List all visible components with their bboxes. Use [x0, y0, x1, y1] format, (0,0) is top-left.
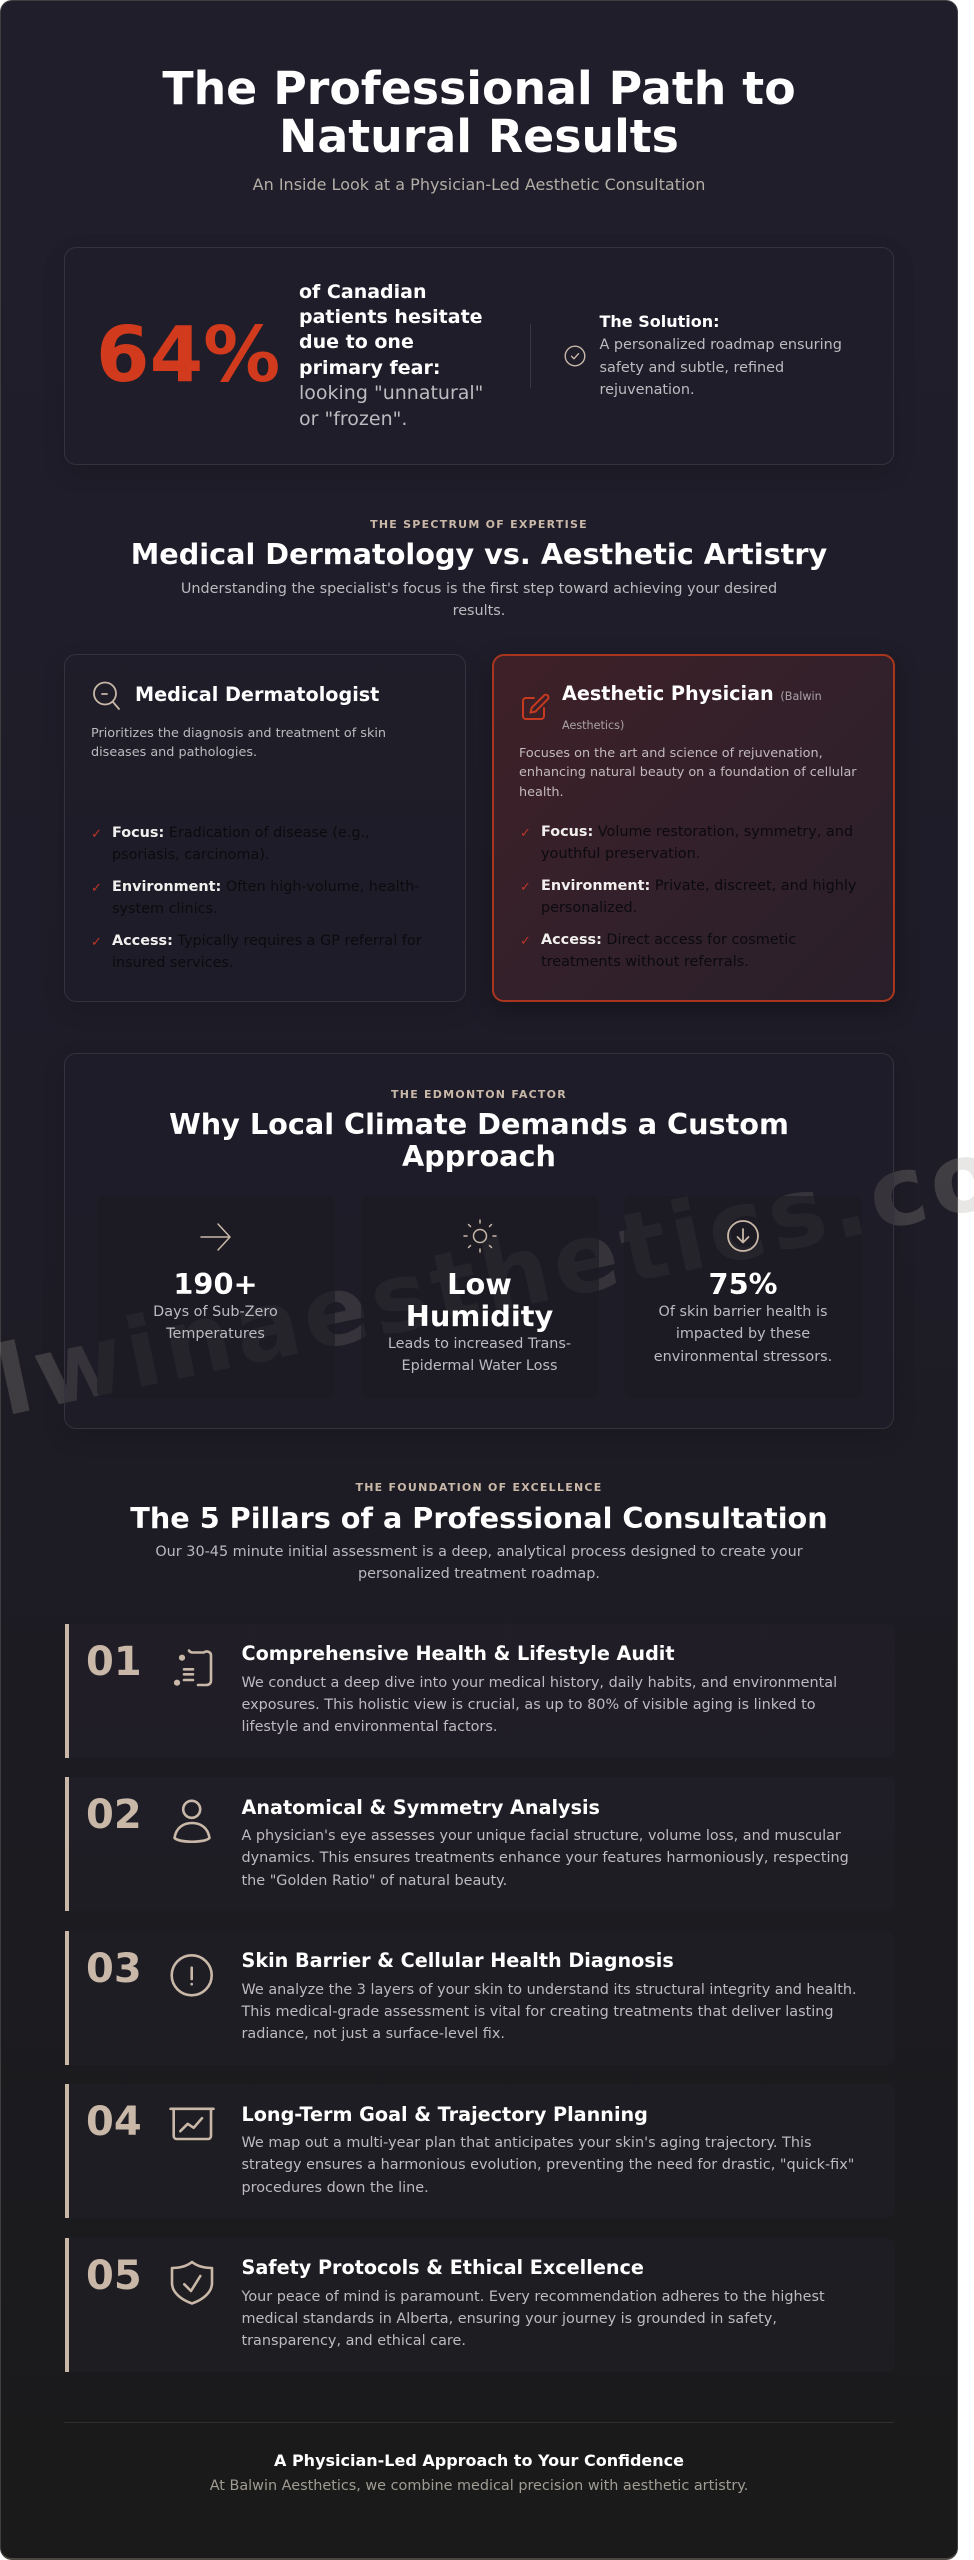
section intro: Understanding the specialist's focus is the first step toward achieving your desired	[181, 580, 777, 596]
pillar 02	[65, 1777, 895, 1911]
description: Of skin barrier health is	[658, 1304, 828, 1320]
description: Epidermal Water Loss	[402, 1358, 557, 1374]
stat description	[299, 280, 483, 430]
stat description: patients hesitate	[299, 306, 483, 328]
value: 75%	[709, 1267, 777, 1301]
title: Natural Results	[279, 109, 679, 163]
section label: spectrum: THE SPECTRUM OF EXPERTISE	[370, 518, 588, 531]
physician description	[519, 746, 857, 800]
text: strategy ensures a harmonious evolution, preventing the need for drastic, "quick-fix"	[242, 2157, 854, 2173]
stat description: primary fear:	[299, 357, 440, 379]
icon: shield check	[170, 2260, 214, 2305]
section heading: climate: Why Local Climate Demands a Custom	[169, 1107, 789, 1141]
title: Comprehensive Health & Lifestyle Audit	[242, 1642, 675, 1665]
section intro: results.	[453, 603, 505, 619]
icon: check circle	[564, 346, 586, 366]
footer text: At Balwin Aesthetics, we combine medical precision with aesthetic artistry.	[210, 2478, 748, 2494]
pillar 03	[65, 1930, 895, 2064]
check: ✓	[91, 881, 102, 896]
stat description: looking "unnatural"	[299, 382, 483, 404]
pillar 05	[65, 2238, 895, 2372]
description	[654, 1304, 832, 1365]
footer heading: A Physician-Led Approach to Your Confidence	[274, 2451, 684, 2470]
icon: pen square	[522, 694, 550, 720]
stat card: low humidity	[360, 1196, 598, 1398]
dermatologist list: Focus: Eradication of disease (e.g.,	[112, 825, 370, 841]
section intro	[155, 1544, 803, 1582]
section intro	[181, 580, 777, 619]
panel: Edmonton factor	[64, 1053, 894, 1429]
section label: foundation: THE FOUNDATION OF EXCELLENCE	[355, 1481, 603, 1494]
text	[242, 1674, 837, 1735]
panel: aesthetic physician	[492, 654, 895, 1002]
dermatologist list	[112, 825, 370, 863]
text	[242, 2135, 854, 2196]
physician title: Aesthetics)	[562, 718, 624, 732]
physician focus item: youthful preservation.	[541, 846, 700, 862]
access item: Access: Typically requires a GP referral for	[112, 933, 422, 949]
text: Your peace of mind is paramount. Every recommendation adheres to the highest	[242, 2288, 825, 2304]
description	[388, 1336, 571, 1374]
physician access item: treatments without referrals.	[541, 954, 749, 970]
text: lifestyle and environmental factors.	[242, 1719, 497, 1735]
text: We analyze the 3 layers of your skin to understand its structural integrity and health.	[242, 1982, 857, 1998]
value: 190+	[173, 1267, 258, 1301]
physician description: enhancing natural beauty on a foundation of cellular	[519, 765, 857, 780]
text: exposures. This holistic view is crucial, as up to 80% of visible aging is linked to	[242, 1697, 816, 1713]
check: ✓	[520, 880, 531, 895]
stat description: or "frozen".	[299, 408, 407, 430]
text: radiance, not just a surface-level fix.	[242, 2026, 505, 2042]
description: environmental stressors.	[654, 1349, 832, 1365]
divider	[530, 324, 531, 388]
value: Humidity	[406, 1299, 553, 1333]
text: dynamics. This ensures treatments enhance your features harmoniously, respecting	[242, 1850, 849, 1866]
text: A physician's eye assesses your unique facial structure, volume loss, and muscular	[242, 1828, 841, 1844]
description	[153, 1304, 278, 1342]
solution text: A personalized roadmap ensuring	[600, 337, 842, 353]
text: transparency, and ethical care.	[242, 2333, 466, 2349]
section intro: Our 30-45 minute initial assessment is a deep, analytical process designed to create your	[155, 1544, 803, 1560]
section label: Edmonton: THE EDMONTON FACTOR	[391, 1088, 567, 1101]
value: Low	[447, 1267, 512, 1301]
icon: alert circle	[170, 1954, 213, 1997]
check: ✓	[91, 827, 102, 842]
panel: medical dermatologist	[64, 654, 466, 1002]
environment item: Environment: Often high-volume, health-	[112, 879, 420, 895]
icon: arrow down circle	[727, 1220, 759, 1252]
physician environment item: Environment: Private, discreet, and highly	[541, 878, 856, 894]
solution text: The Solution:	[600, 312, 720, 331]
icon: person	[173, 1800, 211, 1843]
big stat 64%: 64%	[96, 311, 280, 400]
physician environment item: personalized.	[541, 900, 637, 916]
solution text: safety and subtle, refined	[600, 360, 784, 376]
physician access item	[541, 932, 796, 970]
number: 03	[86, 1946, 142, 1992]
physician title	[562, 682, 822, 732]
section heading: dermatology vs artistry: Medical Dermatology vs. Aesthetic Artistry	[131, 537, 827, 571]
text: We conduct a deep dive into your medical history, daily habits, and environmental	[242, 1674, 837, 1690]
icon: magnifier	[93, 682, 120, 710]
section heading: climate	[169, 1107, 789, 1173]
dermatologist list: psoriasis, carcinoma).	[112, 847, 270, 863]
title: Anatomical & Symmetry Analysis	[242, 1796, 600, 1818]
dermatologist description: Prioritizes the diagnosis and treatment of skin	[91, 726, 386, 741]
text	[242, 1828, 849, 1889]
section heading: climate: Approach	[402, 1139, 556, 1173]
description: Days of Sub-Zero	[153, 1304, 278, 1320]
subtitle: An Inside Look at a Physician-Led Aesthetic Consultation	[253, 174, 705, 194]
icon: arrow	[200, 1223, 231, 1251]
physician description: Focuses on the art and science of rejuvenation,	[519, 746, 823, 761]
dermatologist description	[91, 726, 386, 760]
solution text	[600, 312, 842, 398]
panel: 64 percent statistic	[64, 247, 894, 465]
physician description: health.	[519, 785, 564, 800]
icon: clipboard list	[174, 1649, 212, 1686]
title: Long-Term Goal & Trajectory Planning	[242, 2102, 648, 2126]
dermatologist title: Medical Dermatologist	[135, 683, 379, 706]
physician focus item: Focus: Volume restoration, symmetry, and	[541, 824, 853, 840]
value	[406, 1267, 553, 1333]
text: We map out a multi-year plan that anticipates your skin's aging trajectory. This	[242, 2135, 811, 2151]
stat card: 190+	[96, 1196, 334, 1398]
description: Leads to increased Trans-	[388, 1336, 571, 1352]
description: impacted by these	[676, 1326, 810, 1342]
check: ✓	[520, 826, 531, 841]
check: ✓	[520, 934, 531, 949]
text	[242, 2288, 825, 2349]
access item	[112, 933, 422, 971]
text: the "Golden Ratio" of natural beauty.	[242, 1873, 507, 1889]
pillar 01	[65, 1624, 895, 1758]
text: procedures down the line.	[242, 2180, 429, 2196]
text	[241, 1982, 857, 2042]
stat description: of Canadian	[299, 280, 427, 302]
solution text: rejuvenation.	[600, 382, 695, 398]
icon: chart board	[169, 2108, 215, 2140]
title: Skin Barrier & Cellular Health Diagnosis	[242, 1949, 674, 1972]
stat description: due to one	[299, 331, 414, 353]
physician environment item	[541, 878, 856, 916]
title: Safety Protocols & Ethical Excellence	[242, 2256, 644, 2279]
number: 02	[86, 1792, 142, 1838]
number: 01	[86, 1638, 142, 1684]
physician access item: Access: Direct access for cosmetic	[541, 932, 796, 948]
number: 05	[86, 2252, 142, 2298]
environment item: system clinics.	[112, 901, 218, 917]
title: The Professional Path to	[162, 61, 796, 115]
pillar 04	[65, 2084, 895, 2218]
section intro: personalized treatment roadmap.	[358, 1566, 600, 1582]
description: Temperatures	[166, 1326, 265, 1342]
text: medical standards in Alberta, ensuring your journey is grounded in safety,	[242, 2311, 777, 2327]
number: 04	[86, 2099, 142, 2145]
environment item	[112, 879, 420, 917]
section heading: 5 pillars: The 5 Pillars of a Professional Consultation	[130, 1501, 828, 1535]
stat card: 75%	[624, 1196, 862, 1398]
physician title: Aesthetic Physician (Balwin	[562, 682, 822, 704]
dermatologist description: diseases and pathologies.	[91, 745, 257, 760]
text: This medical-grade assessment is vital for creating treatments that deliver lasting	[242, 2004, 833, 2020]
title	[162, 61, 796, 163]
physician focus item	[541, 824, 853, 862]
access item: insured services.	[112, 955, 234, 971]
check: ✓	[91, 935, 102, 950]
icon: sun	[463, 1219, 497, 1253]
